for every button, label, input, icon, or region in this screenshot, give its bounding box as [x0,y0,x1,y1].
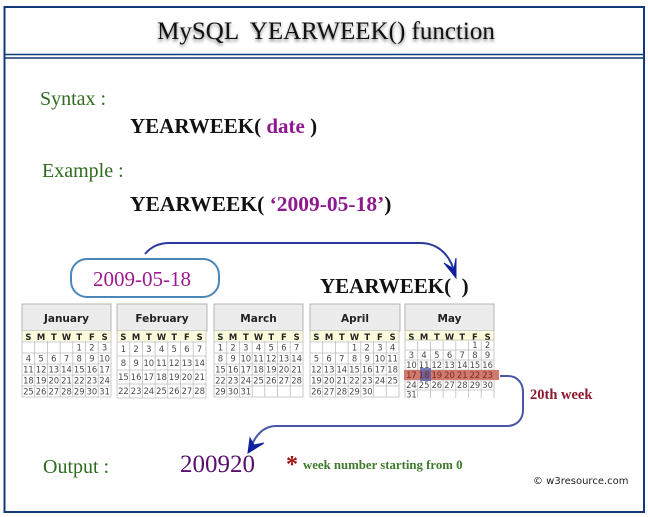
calendar: March: 7 [294,342,299,352]
calendar: May: 14 [457,360,468,370]
calendar: May: 21 [457,370,468,380]
calendar: February: 1 [121,344,126,354]
calendar: January: 26 [36,386,46,396]
calendar: April [310,304,400,397]
calendar: January [22,304,111,397]
calendar: February: 16 [131,372,141,382]
calendar: January: 29 [74,386,85,396]
title: MySQL YEARWEEK() function [157,20,495,47]
calendar: May: May [437,313,462,325]
calendar: March: 8 [218,354,223,364]
calendar: May: 17 [406,370,417,380]
calendar: May: 16 [482,360,493,370]
calendar: January: 18 [23,376,34,386]
calendar: March: 25 [253,376,264,386]
calendar: April: 3 [377,342,383,352]
calendar: April: 24 [375,376,385,386]
calendar: May: 24 [406,380,417,390]
title divider [5,54,644,58]
calendar: May: 12 [431,360,442,370]
calendar: May: 9 [485,350,490,360]
function label: YEARWEEK( ) [320,274,469,298]
calendar: April: 19 [311,376,322,386]
calendar: March: 19 [266,364,277,374]
calendar: March: 1 [218,342,223,352]
calendar: March [214,304,303,397]
calendar: May: 2 [485,340,490,350]
calendar: February: 5 [172,344,177,354]
highlighted week 20 [404,370,499,380]
calendar: January: 17 [99,364,110,374]
calendar: February: 9 [133,358,139,368]
calendar: February: 14 [194,358,205,368]
calendar: March: 27 [279,376,289,386]
calendar: May: 27 [444,380,455,390]
calendar: March: 24 [240,376,251,386]
calendar: April: 8 [352,354,357,364]
calendar: April: 17 [375,364,385,374]
output value: 200920 [180,451,255,478]
calendar: February: 24 [143,386,154,396]
calendar: February: 11 [156,358,167,368]
example code: YEARWEEK( ‘2009-05-18’) [130,192,391,216]
calendar: January: 20 [48,376,59,386]
date input box [71,259,219,297]
calendar: January: 4 [26,354,31,364]
calendar: January: 10 [99,354,110,364]
calendar: March: 3 [243,342,248,352]
week annotation: 20th week [530,387,593,403]
calendar: April: 12 [311,364,322,374]
calendar: February: 10 [143,358,154,368]
calendar: March: 20 [279,364,289,374]
calendar: April: 21 [336,376,347,386]
calendar: February: 21 [194,372,205,382]
calendar: March: 26 [266,376,277,386]
calendar: May: 8 [472,350,478,360]
calendar: February: 25 [156,386,167,396]
asterisk: * [286,452,298,478]
calendar: January: 8 [77,354,82,364]
calendar: March: 28 [291,376,302,386]
syntax label: Syntax : [40,88,106,110]
calendar: April: 7 [339,354,344,364]
calendar: February [117,304,207,398]
syntax code: YEARWEEK( date ) [130,114,317,138]
calendar: January: 11 [23,364,34,374]
highlighted date 18 [420,368,431,381]
calendar: January: 21 [61,376,72,386]
calendar: May: 10 [406,360,417,370]
copyright: © w3resource.com [533,476,629,487]
calendar: February: 2 [133,344,139,354]
calendar: March: March [240,313,277,325]
calendar: May: 6 [447,350,452,360]
calendar: April: 18 [387,364,398,374]
calendar: April: 28 [336,386,347,396]
calendar: January: 13 [48,364,59,374]
calendar: February: 22 [118,386,129,396]
calendar: February: 20 [182,372,192,382]
calendar: January: 12 [36,364,46,374]
calendar: January: 5 [38,354,44,364]
calendar: January: 7 [64,354,69,364]
calendar: May: 5 [434,350,439,360]
calendar: May: 18 [419,370,429,380]
calendar: March: 5 [269,342,274,352]
calendar: May: 19 [431,370,442,380]
calendar: February: 12 [169,358,180,368]
arrow: week to output [248,376,523,453]
calendar: March: 10 [240,354,251,364]
calendar: February: 19 [169,372,180,382]
calendar: February: 27 [182,386,192,396]
calendar: May: 20 [444,370,455,380]
calendar: January: 30 [87,386,97,396]
calendar: April: 26 [311,386,322,396]
calendar: February: 28 [194,386,205,396]
calendar: March: 14 [291,354,302,364]
calendar: April: 16 [362,364,373,374]
calendar: April: 10 [375,354,385,364]
calendar: April: 1 [352,342,357,352]
calendar: January: 23 [87,376,97,386]
calendar: March: 23 [228,376,238,386]
calendar: January: 14 [61,364,72,374]
calendar: March: 2 [230,342,236,352]
calendar: May: 3 [409,350,414,360]
calendar: April: 29 [349,386,360,396]
calendar: May: 11 [419,360,429,370]
calendar: February: 13 [182,358,192,368]
calendar: January: 25 [23,386,34,396]
example label: Example : [42,160,124,182]
calendar: April: 6 [326,354,332,364]
calendar: March: 21 [291,364,302,374]
calendar: May: 30 [482,380,493,390]
calendar: March: 4 [256,342,261,352]
calendar: March: 6 [281,342,287,352]
calendar: March: 29 [215,386,226,396]
calendar: March: 18 [253,364,264,374]
calendar: April: 30 [362,386,373,396]
calendar: March: 30 [228,386,238,396]
date input box: 2009-05-18 [93,267,191,291]
output label: Output : [43,456,109,478]
calendar: January: 6 [51,354,56,364]
calendar: January: 28 [61,386,72,396]
calendar: January: 24 [99,376,110,386]
calendar: January: January [43,313,89,325]
calendar: February: 15 [118,372,129,382]
calendar: April: 9 [365,354,370,364]
calendar: February: 7 [197,344,202,354]
calendar: February: 8 [121,358,126,368]
calendar: February: 18 [156,372,167,382]
calendar: April: 14 [336,364,347,374]
calendar: March: 22 [215,376,226,386]
calendar: February: 6 [184,344,190,354]
calendar: January: 22 [74,376,85,386]
calendar: March: 13 [279,354,289,364]
arrow: date into function [145,243,456,278]
calendar: May: 1 [472,340,478,350]
calendar: February: February [135,313,189,325]
calendar: January: 19 [36,376,46,386]
calendar: April: 22 [349,376,360,386]
calendar: January: 9 [89,354,95,364]
calendar: January: 15 [74,364,85,374]
calendar: January: 2 [89,342,95,352]
calendar: March: 12 [266,354,277,364]
calendar: February: 26 [169,386,180,396]
calendar: April: 11 [387,354,398,364]
title: MySQL YEARWEEK() function [157,18,495,45]
calendar: May: 23 [482,370,493,380]
calendar: April: 15 [349,364,360,374]
calendar: January: 1 [77,342,82,352]
calendar: February: 3 [146,344,151,354]
calendar: May: 25 [419,380,429,390]
calendar: April: 20 [324,376,334,386]
week note: week number starting from 0 [303,458,462,472]
calendar: March: 15 [215,364,226,374]
calendar: March: 11 [253,354,264,364]
calendar: May: 13 [444,360,455,370]
calendar: April: 23 [362,376,373,386]
calendar: March: 9 [230,354,236,364]
calendar: May: 29 [470,380,480,390]
calendar: April: 5 [314,354,319,364]
calendar: April: 2 [365,342,370,352]
calendar: May [404,304,499,400]
calendar: March: 31 [240,386,251,396]
calendar: January: 3 [102,342,107,352]
calendar: February: 4 [159,344,164,354]
calendar: May: 15 [470,360,480,370]
calendar: May: 31 [406,390,417,400]
calendar: January: 27 [48,386,59,396]
calendar: January: 16 [87,364,97,374]
calendar: April: 4 [390,342,395,352]
calendar: April: 27 [324,386,334,396]
calendar: May: 7 [460,350,465,360]
calendar: May: 4 [421,350,427,360]
calendar: February: 23 [131,386,141,396]
calendar: May: 26 [431,380,442,390]
calendar: March: 16 [228,364,238,374]
calendar: April: 25 [387,376,398,386]
calendar: January: 31 [99,386,110,396]
calendar: April: 13 [324,364,334,374]
calendar: April: April [341,313,369,325]
calendar: May: 28 [457,380,468,390]
calendar: May: 22 [470,370,480,380]
calendar: February: 17 [143,372,154,382]
calendar: March: 17 [240,364,251,374]
